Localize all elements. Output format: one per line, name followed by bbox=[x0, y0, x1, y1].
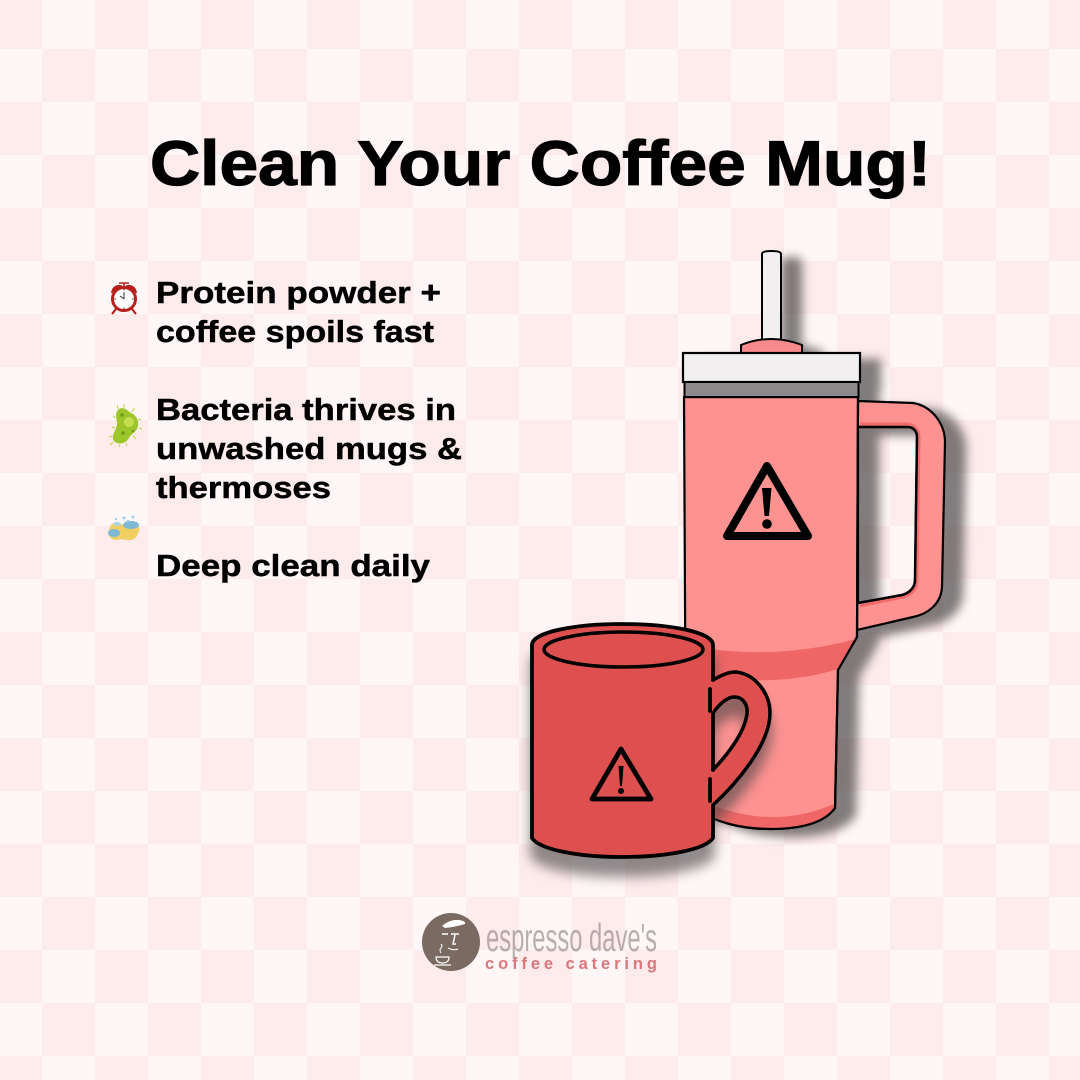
base band bbox=[700, 800, 835, 828]
logo badge bbox=[422, 913, 480, 971]
text: bacteria: thermoses bbox=[156, 470, 331, 505]
text: bacteria: Bacteria thrives in bbox=[156, 392, 456, 427]
tumbler body bbox=[684, 397, 858, 829]
mug handle bbox=[711, 672, 770, 806]
logo: espresso dave's bbox=[422, 913, 657, 973]
warning sign, small bbox=[592, 749, 651, 799]
warning sign, large bbox=[727, 466, 808, 536]
straw bbox=[762, 251, 781, 342]
tumbler outline bbox=[684, 397, 858, 829]
text: protein powder bbox=[156, 275, 441, 349]
handle bbox=[857, 401, 945, 630]
lid gasket bbox=[684, 382, 858, 397]
illustration: mug bbox=[532, 624, 770, 857]
icon: soapy sponge bbox=[108, 516, 139, 540]
lid cap bbox=[741, 339, 802, 353]
logo wordmark: espresso dave's bbox=[486, 917, 657, 960]
illustration: tumbler bbox=[683, 251, 945, 829]
text: bacteria bbox=[156, 392, 462, 505]
text: deep clean: Deep clean daily bbox=[156, 548, 431, 583]
text: protein powder: coffee spoils fast bbox=[156, 314, 434, 349]
icon: alarm clock bbox=[112, 283, 136, 314]
title: Clean Your Coffee Mug! bbox=[150, 129, 931, 199]
mug body bbox=[532, 624, 713, 857]
text: bacteria: unwashed mugs & bbox=[156, 431, 462, 466]
icon: green bacteria bbox=[109, 404, 142, 447]
panel: tips list bbox=[108, 275, 462, 583]
lid bbox=[683, 353, 860, 382]
text: protein powder: Protein powder + bbox=[156, 275, 441, 310]
logo tagline: coffee catering bbox=[485, 955, 657, 973]
colour band bbox=[686, 639, 856, 680]
mug outline bbox=[532, 624, 713, 857]
mug opening bbox=[544, 632, 703, 667]
